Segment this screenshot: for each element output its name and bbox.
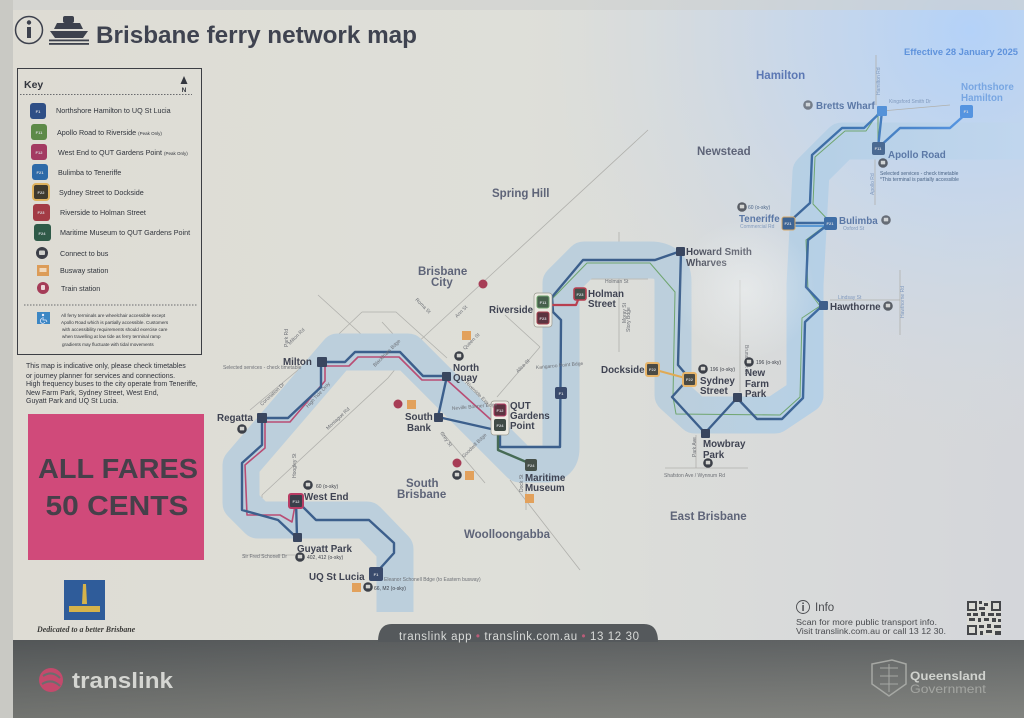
terminal: Dockside bbox=[646, 363, 659, 376]
road labels: Park Ave bbox=[692, 437, 698, 457]
road labels: Hamilton Rd bbox=[876, 67, 882, 95]
accessibility note: with accessibility requirements should exercise care bbox=[62, 327, 168, 332]
terminal: West End: F12 bbox=[293, 499, 300, 504]
road labels: *This terminal is partially accessible bbox=[880, 177, 959, 183]
road labels: Kingsford Smith Dr bbox=[889, 99, 931, 105]
road labels: Apollo Rd bbox=[870, 173, 876, 195]
panel: key: F22 bbox=[38, 190, 45, 195]
terminal: Sydney Street bbox=[683, 373, 696, 386]
terminal: Sydney Street: F22 bbox=[686, 377, 694, 382]
terminal: Northshore Hamilton bbox=[960, 105, 973, 118]
accessibility note: Apollo Road which is partially accessible. Customers bbox=[61, 320, 169, 325]
station labels: Hamilton bbox=[961, 93, 1003, 104]
station labels: Bank bbox=[407, 423, 432, 434]
station labels: Milton bbox=[283, 357, 312, 368]
road labels: Neville Bonner Bdge bbox=[452, 402, 498, 412]
terminal: Northshore Hamilton: F1 bbox=[964, 109, 969, 114]
station labels: Riverside bbox=[489, 305, 534, 316]
road labels: Story Bdge bbox=[626, 307, 632, 332]
station labels: Guyatt Park bbox=[297, 544, 353, 555]
suburb labels: Spring Hill bbox=[492, 188, 550, 200]
disclaimer text: or journey planner for services and connections. bbox=[26, 373, 175, 380]
route F11 Apollo Road to Riverside bbox=[552, 113, 878, 415]
route F21 Bulimba to Teneriffe bbox=[788, 225, 830, 227]
panel: key bbox=[18, 68, 202, 354]
terminal: QUT Gardens Point bbox=[491, 401, 509, 435]
disclaimer text: High frequency buses to the city operate from Teneriffe, bbox=[26, 381, 198, 388]
panel: key: Riverside to Holman Street bbox=[60, 208, 146, 217]
terminal: UQ St Lucia bbox=[369, 567, 383, 581]
icon: north arrow: N bbox=[182, 87, 187, 94]
station labels: West End bbox=[304, 492, 348, 503]
panel: key: Busway station bbox=[60, 266, 108, 275]
road labels: Montague Rd bbox=[325, 406, 351, 431]
terminal: Teneriffe: F21 bbox=[785, 221, 792, 226]
suburb labels: Brisbane bbox=[418, 266, 467, 278]
accessibility note: when travelling at low tide as ferry terminal ramp bbox=[62, 334, 161, 339]
disclaimer text bbox=[26, 363, 198, 405]
station labels: Mowbray bbox=[703, 439, 746, 450]
suburb labels: Newstead bbox=[697, 146, 751, 158]
road labels: Coronation Dr bbox=[259, 382, 286, 407]
bus route notes: 196 (o-sky) bbox=[756, 360, 781, 366]
station labels: New bbox=[745, 368, 766, 379]
panel: all fares 50 cents bbox=[28, 414, 204, 560]
bus, busway and train station icons on map bbox=[237, 100, 893, 592]
terminal: West End bbox=[289, 494, 303, 508]
station labels: Street bbox=[588, 299, 617, 310]
effective date: Effective 28 January 2025 bbox=[904, 47, 1019, 58]
accessibility note: All ferry terminals are wheelchair accessible except bbox=[61, 313, 166, 318]
station labels: Regatta bbox=[217, 413, 253, 424]
panel: key: Northshore Hamilton to UQ St Lucia bbox=[56, 106, 171, 115]
icon: north arrow bbox=[180, 76, 188, 94]
station labels: Park bbox=[745, 389, 767, 400]
road labels: Lindsay St bbox=[838, 295, 862, 301]
station labels: Street bbox=[700, 386, 729, 397]
station labels: Bretts Wharf bbox=[816, 101, 876, 112]
heading: Brisbane ferry network map bbox=[96, 22, 417, 49]
road labels: Roma St bbox=[414, 297, 432, 316]
terminal: Riverside: F23 bbox=[540, 316, 547, 321]
road labels bbox=[223, 67, 959, 583]
bus route notes: 196 (o-sky) bbox=[710, 367, 735, 373]
road labels: Alice St bbox=[515, 358, 532, 374]
panel: key: Sydney Street to Dockside bbox=[59, 188, 144, 197]
route F24 Maritime Museum to QUT bbox=[498, 433, 531, 464]
panel: key: F24 bbox=[39, 231, 46, 236]
station labels: South bbox=[405, 412, 433, 423]
terminal: UQ St Lucia: F1 bbox=[374, 572, 379, 577]
road labels: High Tide Only bbox=[305, 381, 332, 409]
contact tab: translink app • translink.com.au • 13 12 30 bbox=[399, 631, 639, 643]
icon: wheelchair bbox=[37, 312, 50, 324]
panel: key: Maritime Museum to QUT Gardens Point bbox=[60, 228, 190, 237]
station labels: Holman bbox=[588, 289, 624, 300]
road labels: Hoogley St bbox=[292, 453, 298, 478]
terminal: Apollo Road: F11 bbox=[875, 146, 882, 151]
panel: key: Bulimba to Teneriffe bbox=[58, 168, 121, 177]
station labels: QUT bbox=[510, 401, 531, 412]
route F23 Riverside to Holman Street bbox=[552, 295, 580, 305]
road labels: Grey St bbox=[438, 431, 453, 449]
translink logo bbox=[39, 668, 174, 693]
terminal: Apollo Road bbox=[872, 142, 885, 155]
terminal: Teneriffe bbox=[782, 217, 795, 230]
station labels bbox=[217, 82, 1014, 583]
station labels: Apollo Road bbox=[888, 150, 946, 161]
icon: info bbox=[16, 16, 42, 44]
road labels: Sir Fred Schonell Dr bbox=[242, 554, 287, 560]
panel: key: Connect to bus bbox=[60, 249, 109, 258]
road labels: Hawthorne Rd bbox=[900, 286, 906, 318]
terminal: QUT Gardens Point: F12 bbox=[497, 408, 504, 413]
suburb labels: Woolloongabba bbox=[464, 529, 551, 541]
terminal: Bulimba bbox=[824, 217, 837, 230]
Brisbane City logo: Dedicated to a better Brisbane bbox=[36, 625, 136, 634]
panel: all fares 50 cents: 50 CENTS bbox=[46, 490, 188, 521]
suburb labels: City bbox=[431, 277, 453, 289]
accessibility note: gradients may fluctuate with tidal movements bbox=[62, 342, 154, 347]
station labels: Bulimba bbox=[839, 216, 878, 227]
suburb labels bbox=[397, 70, 805, 541]
panel: all fares 50 cents: ALL FARES bbox=[38, 453, 198, 484]
station labels: Wharves bbox=[686, 258, 727, 269]
Queensland Government logo: Queensland bbox=[910, 669, 986, 683]
terminal: river F1 midpoint: F1 bbox=[559, 391, 564, 396]
road labels: Queen St bbox=[462, 332, 482, 351]
window glare bbox=[670, 220, 820, 360]
terminal: QUT Gardens Point: F24 bbox=[497, 423, 504, 428]
terminal: Dockside: F22 bbox=[649, 367, 657, 372]
bus route notes: 60 (o-sky) bbox=[316, 484, 339, 490]
road labels: Moray St bbox=[622, 302, 628, 323]
road labels: Selected services - check timetable bbox=[880, 171, 959, 177]
river band bbox=[241, 141, 1024, 612]
accessibility note bbox=[61, 313, 169, 347]
suburb labels: Hamilton bbox=[756, 70, 805, 82]
road labels: Kangaroo Point Bdge bbox=[536, 361, 584, 371]
panel: key: F12 bbox=[36, 150, 43, 155]
panel: key: F21 bbox=[37, 170, 44, 175]
title bbox=[16, 16, 417, 49]
station labels: Maritime bbox=[525, 473, 566, 484]
road labels: Park Rd bbox=[284, 329, 290, 347]
info block: Info bbox=[815, 602, 834, 614]
suburb labels: East Brisbane bbox=[670, 511, 747, 523]
info block bbox=[796, 600, 946, 636]
panel: key: Train station bbox=[61, 284, 100, 293]
disclaimer text: Guyatt Park and UQ St Lucia. bbox=[26, 398, 118, 405]
road labels: Goodwill Bdge bbox=[461, 432, 488, 459]
terminal: Riverside bbox=[534, 293, 552, 327]
station labels: Farm bbox=[745, 379, 769, 390]
station labels: Park bbox=[703, 450, 725, 461]
station labels: Gardens bbox=[510, 411, 550, 422]
terminal: Maritime Museum bbox=[525, 459, 537, 471]
info block: Visit translink.com.au or call 13 12 30. bbox=[796, 627, 946, 636]
road labels: Selected services - check timetable bbox=[223, 365, 302, 371]
station labels: Dockside bbox=[601, 365, 645, 376]
suburb labels: Brisbane bbox=[397, 489, 446, 501]
panel: key: F1 bbox=[36, 109, 41, 114]
Brisbane City logo bbox=[36, 580, 136, 634]
road labels: Riverside Exp bbox=[464, 380, 490, 406]
footer bar bbox=[13, 624, 1024, 718]
station labels: Museum bbox=[525, 483, 565, 494]
Queensland Government logo: Government bbox=[910, 682, 987, 696]
road labels: Blackfriars Bdge bbox=[372, 338, 402, 368]
panel: key: West End to QUT Gardens Point (Peak Only) bbox=[58, 148, 188, 157]
Queensland Government logo bbox=[872, 660, 987, 696]
road labels: Milton Rd bbox=[287, 327, 307, 346]
station labels: Howard Smith bbox=[686, 247, 752, 258]
bus route notes bbox=[307, 205, 781, 592]
contact tab bbox=[378, 624, 658, 643]
QR code bbox=[967, 601, 1001, 635]
disclaimer text: This map is indicative only, please check timetables bbox=[26, 363, 186, 370]
info block: Scan for more public transport info. bbox=[796, 618, 937, 627]
station labels: Teneriffe bbox=[739, 214, 780, 225]
stops: minor square terminals bbox=[257, 106, 887, 542]
road labels: Ann St bbox=[454, 304, 469, 319]
key heading: Key bbox=[24, 79, 43, 91]
road labels: Eleanor Schonell Bdge (to Eastern busway) bbox=[384, 577, 481, 583]
road labels: Dock St bbox=[519, 474, 525, 492]
station labels: Hawthorne bbox=[830, 302, 881, 313]
map roads bbox=[243, 55, 950, 570]
terminal: Bulimba: F21 bbox=[827, 221, 834, 226]
station labels: Point bbox=[510, 421, 535, 432]
panel: key: Apollo Road to Riverside (Peak Only) bbox=[57, 128, 162, 137]
road labels: Holman St bbox=[605, 279, 629, 285]
bus route notes: 66, M2 (o-sky) bbox=[374, 586, 406, 592]
suburb labels: South bbox=[406, 478, 439, 490]
panel: key: F11 bbox=[36, 130, 43, 135]
terminal: Holman Street bbox=[574, 288, 586, 300]
bus route notes: 402, 412 (o-sky) bbox=[307, 555, 343, 561]
station labels: North bbox=[453, 363, 479, 374]
station labels: UQ St Lucia bbox=[309, 572, 365, 583]
terminal: river F1 midpoint bbox=[555, 387, 567, 399]
station labels: Sydney bbox=[700, 376, 735, 387]
ferry route lines bbox=[242, 111, 968, 573]
icon: ferry bbox=[49, 16, 89, 45]
road labels: Commercial Rd bbox=[740, 224, 775, 230]
disclaimer text: New Farm Park, Sydney Street, West End, bbox=[26, 390, 159, 397]
route F1 Northshore Hamilton to UQ St Lucia bbox=[242, 111, 968, 573]
terminal: Maritime Museum: F24 bbox=[528, 463, 535, 468]
terminal: Riverside: F11 bbox=[540, 300, 547, 305]
road labels: Shafston Ave / Wynnum Rd bbox=[664, 473, 725, 479]
terminal: Holman Street: F23 bbox=[577, 292, 584, 297]
road labels: Brunswick St bbox=[743, 345, 749, 375]
route F22 Sydney Street to Dockside bbox=[652, 369, 689, 379]
panel: key: F23 bbox=[38, 210, 45, 215]
route F12 West End to QUT bbox=[245, 357, 499, 522]
translink logo: translink bbox=[72, 668, 174, 693]
road labels: Oxford St bbox=[843, 226, 865, 232]
station labels: Quay bbox=[453, 373, 478, 384]
station labels: Northshore bbox=[961, 82, 1014, 93]
bus route notes: 60 (o-sky) bbox=[748, 205, 771, 211]
